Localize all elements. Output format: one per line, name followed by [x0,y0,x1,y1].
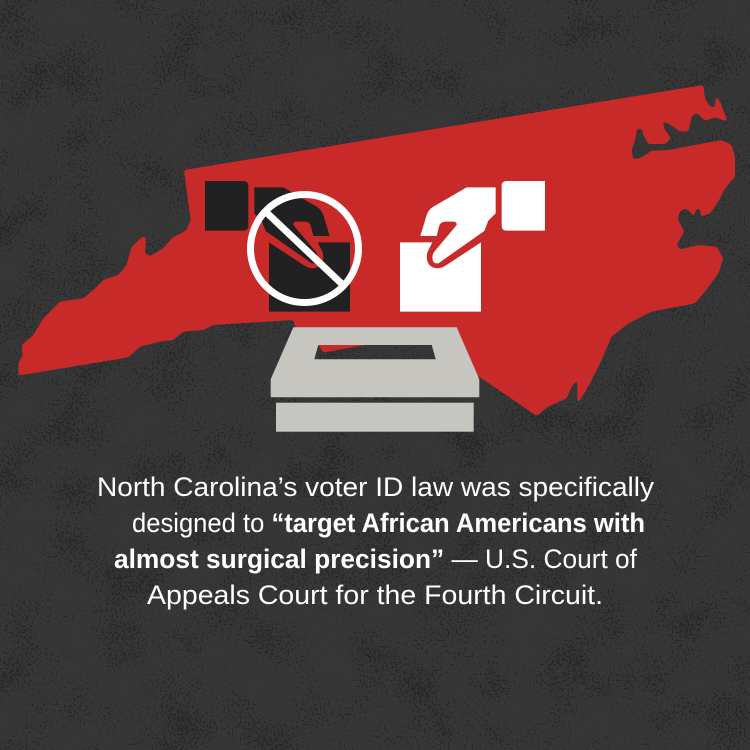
ballot box lid with slot [271,327,479,397]
ballot box front [400,242,481,312]
icon: prohibition sign [250,194,358,302]
ballot card [502,181,545,231]
text block: court quote: almost surgical precision” — U.S. Court of [114,544,638,574]
text block: court quote: designed to “target African Americans with [132,508,645,538]
icon: hand casting ballot (dark, prohibited) [205,181,350,312]
icon: hand casting ballot (white) [400,181,545,312]
text block: court quote: Appeals Court for the Fourth Circuit. [147,580,603,610]
text block: court quote: North Carolina’s voter ID law was specifically [97,472,655,502]
text block: court quote [97,472,655,610]
dark ballot card [205,181,248,231]
ballot box base [276,403,474,432]
map: North Carolina [18,85,735,416]
hand [420,187,496,263]
dark ballot box front [269,242,350,312]
dark hand [254,187,330,263]
icon: ballot box [271,327,479,432]
